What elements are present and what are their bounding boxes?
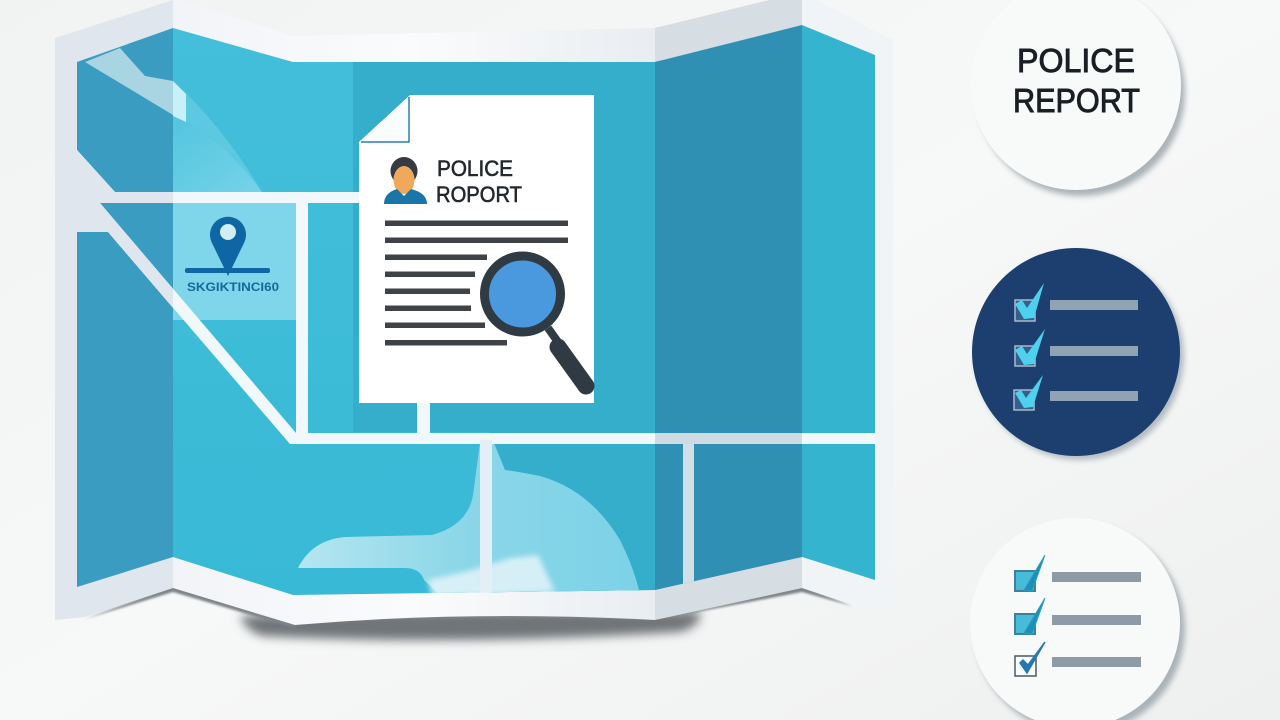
document sheet	[359, 95, 594, 403]
circle: police report label: POLICE	[1017, 42, 1135, 79]
location pin with label	[185, 217, 279, 294]
map shadow	[240, 611, 700, 640]
checklist row two	[1015, 329, 1138, 366]
circle: police report label	[971, 0, 1185, 196]
circle: police report label: REPORT	[1013, 82, 1140, 119]
circle: navy checklist	[972, 248, 1184, 460]
road shading on left fold	[77, 150, 173, 308]
map blue fold panels	[77, 20, 875, 600]
map roads	[77, 150, 875, 600]
checklist row one	[1015, 555, 1141, 591]
checklist row one	[1015, 283, 1138, 321]
document text lines	[385, 220, 568, 346]
document folded corner	[361, 97, 409, 142]
folded map	[55, 0, 893, 628]
location panel	[173, 203, 296, 320]
document heading: ROPORT	[436, 182, 522, 207]
checklist row three	[1014, 375, 1138, 410]
fold crease shadows	[85, 586, 852, 628]
police report document	[359, 95, 594, 403]
location pin with label: SKGIKTINCI60	[187, 280, 279, 294]
lower wave shape	[298, 443, 640, 595]
icon: person	[384, 157, 427, 204]
map highlight shapes	[85, 48, 262, 192]
circle: white checklist	[970, 518, 1185, 720]
icon: magnifying glass	[484, 256, 586, 386]
map paper	[55, 0, 893, 625]
checklist row two	[1015, 598, 1141, 634]
wave lower haze	[428, 555, 555, 597]
checklist row three	[1015, 642, 1141, 676]
road shading on dark fold	[655, 433, 802, 444]
document heading: POLICE	[437, 156, 513, 181]
